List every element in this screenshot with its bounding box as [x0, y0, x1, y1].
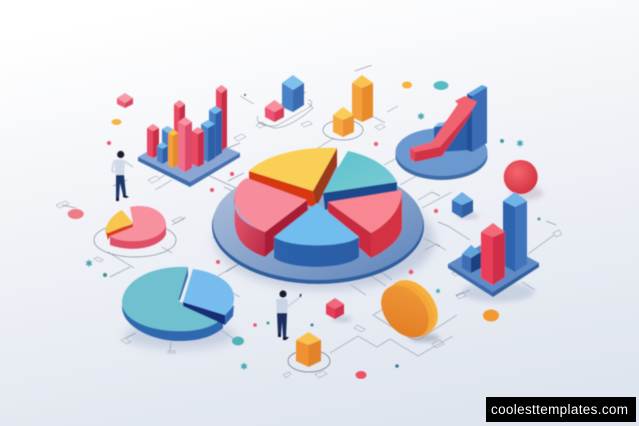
back blue bars	[434, 100, 470, 152]
cube: blue right	[452, 192, 479, 219]
bar 5 orange	[168, 129, 178, 168]
base plate top	[213, 166, 423, 280]
slice: blue	[274, 203, 359, 267]
main pie chart	[212, 148, 435, 290]
small label chips	[56, 121, 562, 378]
coin: yellow top	[402, 82, 412, 88]
cube	[296, 332, 321, 367]
disk	[396, 132, 488, 180]
base plate edge	[212, 168, 424, 284]
red arrow	[410, 96, 477, 162]
bar 4 blue	[157, 142, 168, 164]
person: left	[112, 151, 133, 201]
group: top orange bars	[323, 75, 373, 140]
blue slice top	[183, 269, 234, 315]
bar 2 red	[174, 100, 185, 150]
disc: pink left	[68, 209, 84, 219]
shadow	[462, 282, 534, 302]
disc: orange right	[483, 310, 499, 322]
slice: yellow	[249, 148, 337, 208]
blue slice side	[183, 302, 234, 325]
small teal stars	[85, 112, 524, 372]
disc: red bottom	[356, 371, 366, 379]
bar: blue tall	[503, 192, 527, 272]
arrow chart on disk	[396, 85, 488, 180]
pie shadow	[215, 190, 435, 290]
circuit connector lines	[62, 65, 556, 356]
slice: left pink	[234, 178, 309, 257]
bar 9 blue	[209, 106, 222, 157]
ring	[323, 120, 363, 140]
bar 6 pink	[178, 117, 192, 172]
tall blue bar	[467, 85, 487, 152]
ring	[257, 100, 312, 126]
small teal stars: ✱	[417, 112, 425, 122]
small dots	[103, 94, 540, 368]
watermark: coolesttemplates.com	[491, 402, 628, 417]
watermark	[486, 397, 636, 422]
teal pie top	[122, 267, 223, 331]
small teal stars: ✱	[516, 140, 524, 150]
ring	[94, 223, 176, 257]
bar 8 blue	[201, 120, 215, 162]
bar: blue	[282, 75, 304, 112]
bar 7 red	[192, 127, 204, 167]
teal pie side	[122, 306, 223, 341]
coin: yellow left	[112, 119, 122, 125]
coin: teal top	[434, 81, 448, 90]
bar: blue small	[462, 245, 481, 273]
disc: teal bottom	[232, 336, 244, 346]
bar 10 red	[216, 85, 227, 151]
cube: orange small	[333, 107, 354, 137]
orange cube with ring	[288, 332, 330, 372]
large teal pie chart	[122, 267, 235, 349]
shadow	[125, 321, 235, 349]
yellow slice top	[105, 210, 133, 233]
illustration	[56, 65, 562, 379]
ring	[288, 350, 330, 372]
slice: right pink	[328, 190, 402, 258]
slice: teal	[323, 151, 397, 210]
platform	[448, 238, 539, 297]
bar 3 blue	[162, 126, 173, 160]
pink top	[110, 206, 166, 241]
yellow slice side	[106, 224, 133, 240]
small teal stars: ✱	[85, 260, 93, 270]
pink body	[110, 224, 166, 249]
orange disk	[371, 270, 448, 347]
cube: pink top left	[117, 93, 133, 108]
bar: orange tall	[352, 75, 373, 122]
bar chart: top left	[138, 85, 240, 187]
platform	[138, 130, 240, 187]
small teal stars: ✱	[240, 362, 248, 372]
bar 1 red	[147, 124, 159, 158]
small pie chart: pink with yellow slice	[94, 206, 176, 257]
group: top blue and pink bars	[257, 75, 312, 126]
person: center	[276, 290, 301, 340]
bar chart: right	[448, 192, 539, 302]
cube: pink bottom	[326, 298, 352, 322]
bar: red	[481, 223, 505, 285]
notch edge	[178, 267, 188, 301]
cube: pink	[265, 100, 284, 122]
red sphere	[504, 160, 543, 200]
